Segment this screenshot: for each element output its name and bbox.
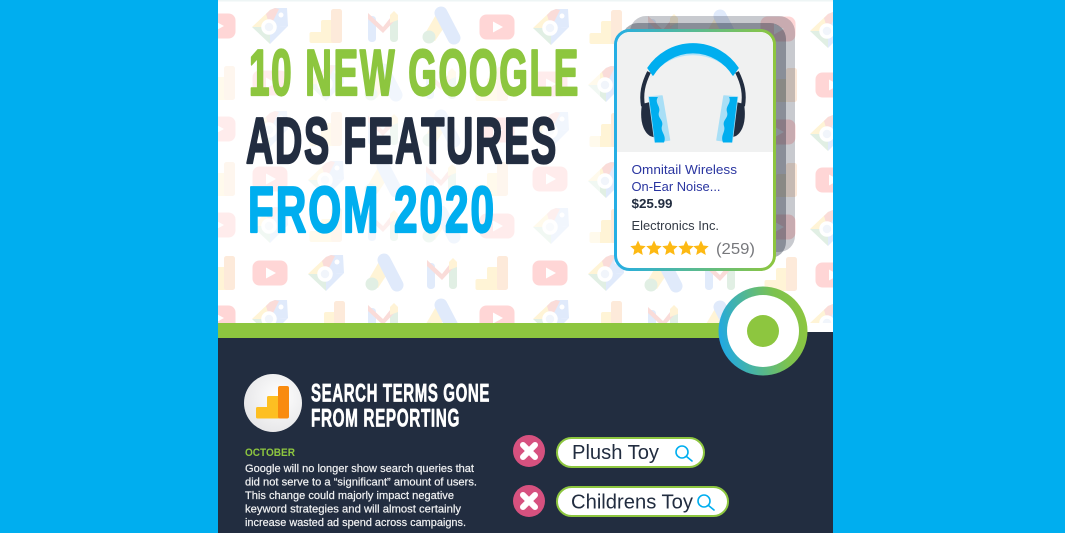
card shadow layer outer xyxy=(630,16,795,252)
product name: On-Ear Noise... xyxy=(632,179,720,194)
timeline marker xyxy=(718,286,808,376)
white page panel xyxy=(218,0,833,533)
body text: keyword strategies and will almost certainly xyxy=(245,504,462,516)
icon: magnifier xyxy=(698,495,714,510)
section heading: FROM REPORTING xyxy=(311,404,460,432)
body text: increase wasted ad spend across campaigns. xyxy=(245,517,466,529)
product name xyxy=(632,162,738,194)
search pill xyxy=(557,487,728,516)
body text: This change could majorly impact negative xyxy=(245,490,454,502)
icon: headphones xyxy=(641,44,745,142)
title line 1: 10 NEW GOOGLE xyxy=(249,37,580,109)
icon: Google Analytics badge xyxy=(244,374,302,432)
search chip: Childrens Toy xyxy=(513,485,728,517)
date label: OCTOBER xyxy=(245,447,295,459)
body text: did not serve to a “significant” amount of users. xyxy=(245,476,477,488)
icon: magnifier xyxy=(676,446,692,461)
icon: pink X xyxy=(513,435,545,467)
background pattern: faded Google product icons xyxy=(200,8,850,340)
price: $25.99 xyxy=(632,196,672,211)
title line 3: FROM 2020 xyxy=(248,174,496,246)
product name: Omnitail Wireless xyxy=(632,162,738,177)
star rating xyxy=(630,240,709,255)
title xyxy=(246,37,580,246)
search chip: Plush Toy xyxy=(513,435,704,467)
search term: Childrens Toy xyxy=(571,492,693,514)
dark content panel xyxy=(218,332,833,533)
seller: Electronics Inc. xyxy=(632,218,719,233)
body text: Google will no longer show search queries that xyxy=(245,463,474,475)
green divider band xyxy=(218,323,728,338)
body text xyxy=(245,463,477,529)
title line 2: ADS FEATURES xyxy=(246,105,558,177)
icon: pink X xyxy=(513,485,545,517)
product ad card with stacked shadows xyxy=(616,16,795,270)
soft white fade behind title xyxy=(218,48,600,246)
search term: Plush Toy xyxy=(572,442,659,464)
product image background xyxy=(617,32,773,152)
card shadow layer inner xyxy=(622,23,786,258)
section heading: SEARCH TERMS GONE xyxy=(311,380,490,408)
review count: (259) xyxy=(716,241,755,258)
search pill xyxy=(557,438,704,467)
card body xyxy=(616,30,774,270)
section heading xyxy=(311,380,490,432)
